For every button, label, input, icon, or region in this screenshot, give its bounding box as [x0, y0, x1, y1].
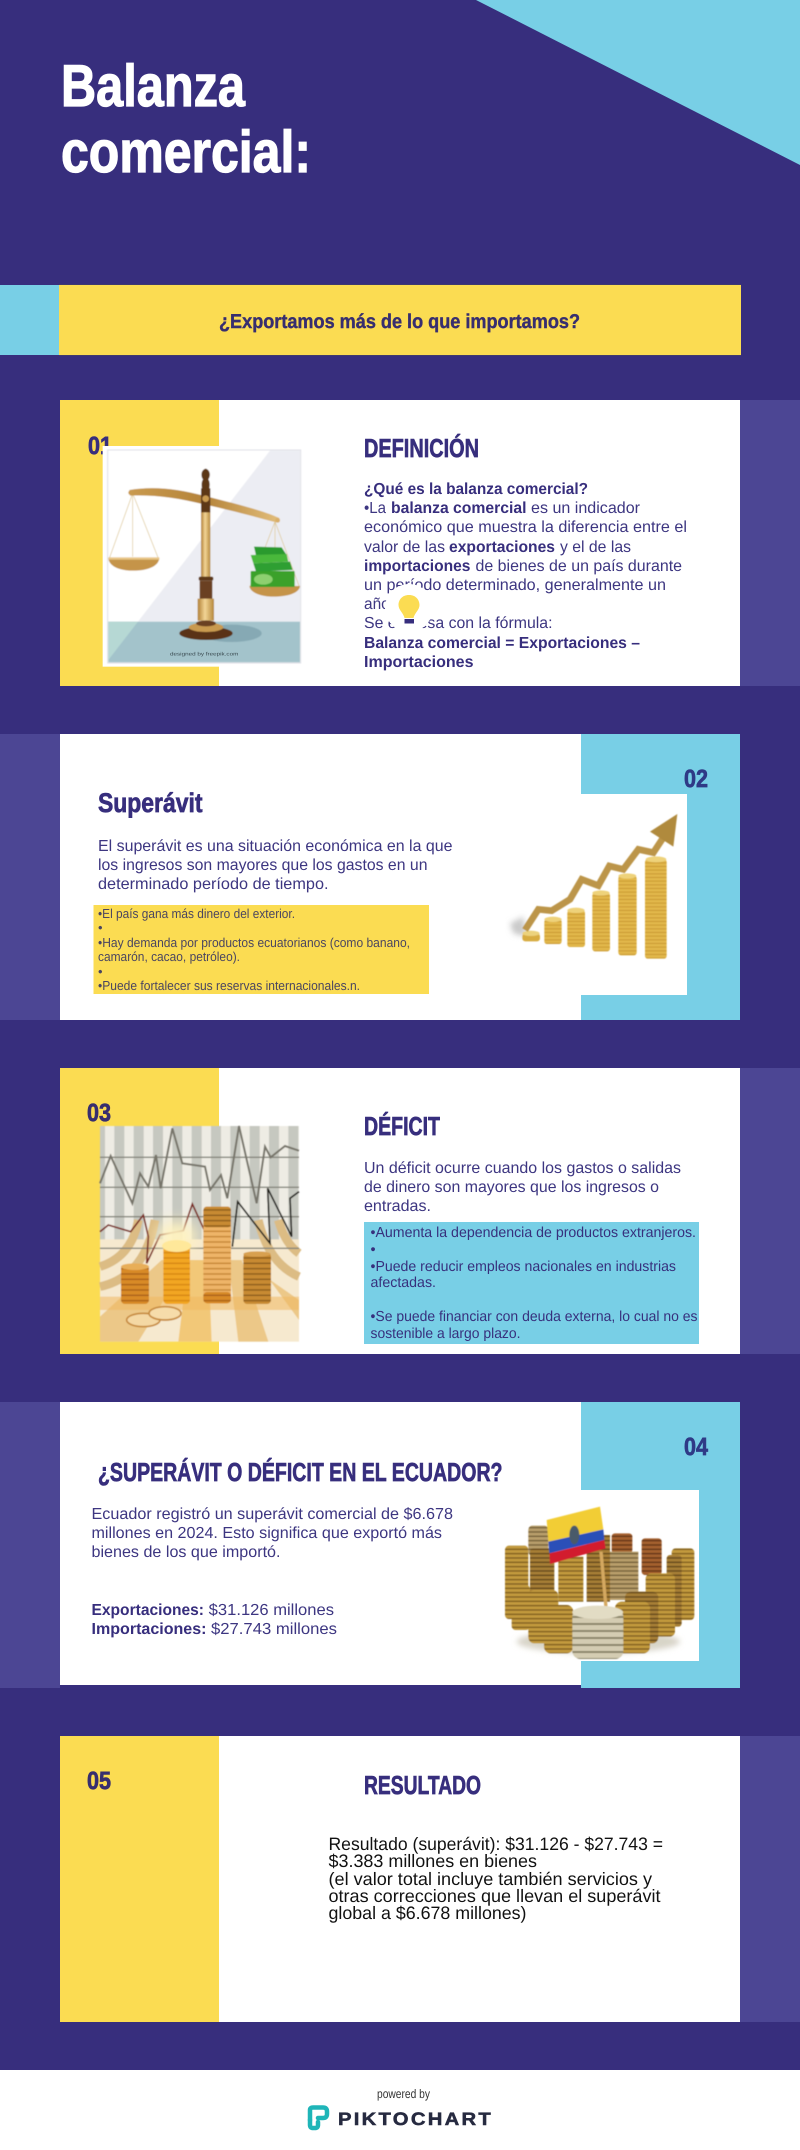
heading: RESULTADO — [364, 1770, 481, 1800]
callout: surplus effects — [94, 905, 429, 994]
callout: surplus effects: camarón, cacao, petróleo). — [98, 949, 240, 964]
callout: deficit effects: •Aumenta la dependencia de productos extranjeros. — [370, 1225, 696, 1241]
deficit text: Un déficit ocurre cuando los gastos o salidas — [364, 1160, 681, 1177]
callout: surplus effects: • — [98, 964, 103, 979]
definition text: Importaciones — [364, 654, 474, 671]
callout: surplus effects: •Puede fortalecer sus reservas internacionales.n. — [98, 978, 360, 993]
heading: ¿SUPERÁVIT O DÉFICIT EN EL ECUADOR? — [98, 1457, 502, 1487]
heading: DEFINICIÓN — [364, 433, 479, 463]
result text: Resultado (superávit): $31.126 - $27.743 = — [328, 1834, 663, 1854]
definition text: es un indicador — [531, 500, 641, 517]
Ecuador text: Exportaciones: — [92, 1602, 204, 1619]
title: Balanza — [61, 53, 246, 119]
icon: light bulb — [385, 584, 433, 632]
footer: Piktochart branding: powered by — [377, 2087, 431, 2101]
number 02: 02 — [684, 765, 708, 793]
surplus text — [98, 838, 453, 893]
heading: Superávit — [98, 788, 203, 818]
definition text: ¿Qué es la balanza comercial? — [364, 481, 588, 498]
callout: deficit effects: • — [370, 1242, 376, 1258]
footer: Piktochart branding — [0, 2070, 800, 2150]
result text: global a $6.678 millones) — [328, 1903, 526, 1923]
deficit text — [364, 1160, 681, 1215]
number 03: 03 — [87, 1099, 111, 1127]
subtitle banner: ¿Exportamos más de lo que importamos? — [219, 311, 580, 333]
definition text: •La — [364, 500, 386, 517]
callout: deficit effects — [364, 1222, 699, 1344]
callout: surplus effects: •El país gana más dinero del exterior. — [98, 906, 295, 921]
footer: Piktochart branding: PIKTOCHART — [338, 2109, 493, 2129]
Ecuador text: millones en 2024. Esto significa que exportó más — [92, 1525, 442, 1542]
heading: DÉFICIT — [364, 1111, 440, 1141]
corner triangle — [476, 0, 800, 165]
Ecuador text: Importaciones: — [92, 1621, 206, 1638]
Ecuador text: $31.126 millones — [209, 1602, 334, 1619]
title — [61, 53, 311, 185]
definition text: económico que muestra la diferencia entre el — [364, 519, 687, 536]
definition text: de bienes de un país durante — [476, 558, 682, 575]
icon: Piktochart logo — [310, 2108, 327, 2128]
deficit text: de dinero son mayores que los ingresos o — [364, 1179, 659, 1196]
number 04: 04 — [684, 1433, 708, 1461]
callout: deficit effects: •Se puede financiar con deuda externa, lo cual no es — [370, 1309, 698, 1325]
panel: Ecuador — [0, 1402, 740, 1688]
title: comercial: — [61, 119, 311, 185]
number 05: 05 — [87, 1767, 111, 1795]
definition text: y el de las — [560, 539, 631, 556]
panel: superávit — [0, 734, 740, 1020]
Ecuador text: $27.743 millones — [211, 1621, 337, 1638]
image: coins with Ecuador flag — [505, 1507, 694, 1659]
callout: surplus effects: •Hay demanda por productos ecuatorianos (como banano, — [98, 935, 410, 950]
panel: resultado — [60, 1736, 800, 2022]
result text: otras correcciones que llevan el superávit — [328, 1886, 660, 1906]
callout: deficit effects: sostenible a largo plazo. — [370, 1326, 520, 1342]
number 01: 01 — [88, 432, 112, 460]
definition text: año. — [364, 596, 394, 613]
definition text: Balanza comercial = Exportaciones – — [364, 635, 640, 652]
panel: definición — [60, 400, 800, 686]
image: rising coin stacks — [510, 814, 677, 959]
image: balance scale with money: designed by freepik.com — [170, 651, 238, 657]
result text: $3.383 millones en bienes — [328, 1851, 537, 1871]
callout: deficit effects: •Puede reducir empleos nacionales en industrias — [370, 1259, 676, 1275]
subtitle banner — [0, 284, 741, 356]
Ecuador text: Ecuador registró un superávit comercial de $6.678 — [92, 1506, 453, 1523]
surplus text: determinado período de tiempo. — [98, 876, 328, 893]
definition text: Se expresa con la fórmula: — [364, 615, 552, 632]
deficit text: entradas. — [364, 1198, 431, 1215]
definition text: exportaciones — [449, 539, 555, 556]
surplus text: los ingresos son mayores que los gastos en un — [98, 857, 428, 874]
definition text: balanza comercial — [391, 500, 526, 517]
definition text: un período determinado, generalmente un — [364, 577, 666, 594]
definition text — [364, 481, 687, 671]
image: coins over line chart — [100, 1126, 299, 1342]
image: balance scale with money — [103, 446, 304, 667]
panel: déficit — [60, 1068, 800, 1354]
definition text: importaciones — [364, 558, 470, 575]
callout: deficit effects: afectadas. — [370, 1275, 436, 1291]
callout: surplus effects: • — [98, 920, 103, 935]
Ecuador text — [92, 1506, 453, 1638]
result text: (el valor total incluye también servicios y — [328, 1869, 652, 1889]
surplus text: El superávit es una situación económica en la que — [98, 838, 453, 855]
result text — [328, 1834, 663, 1923]
definition text: valor de las — [364, 539, 445, 556]
Ecuador text: bienes de los que importó. — [92, 1544, 280, 1561]
